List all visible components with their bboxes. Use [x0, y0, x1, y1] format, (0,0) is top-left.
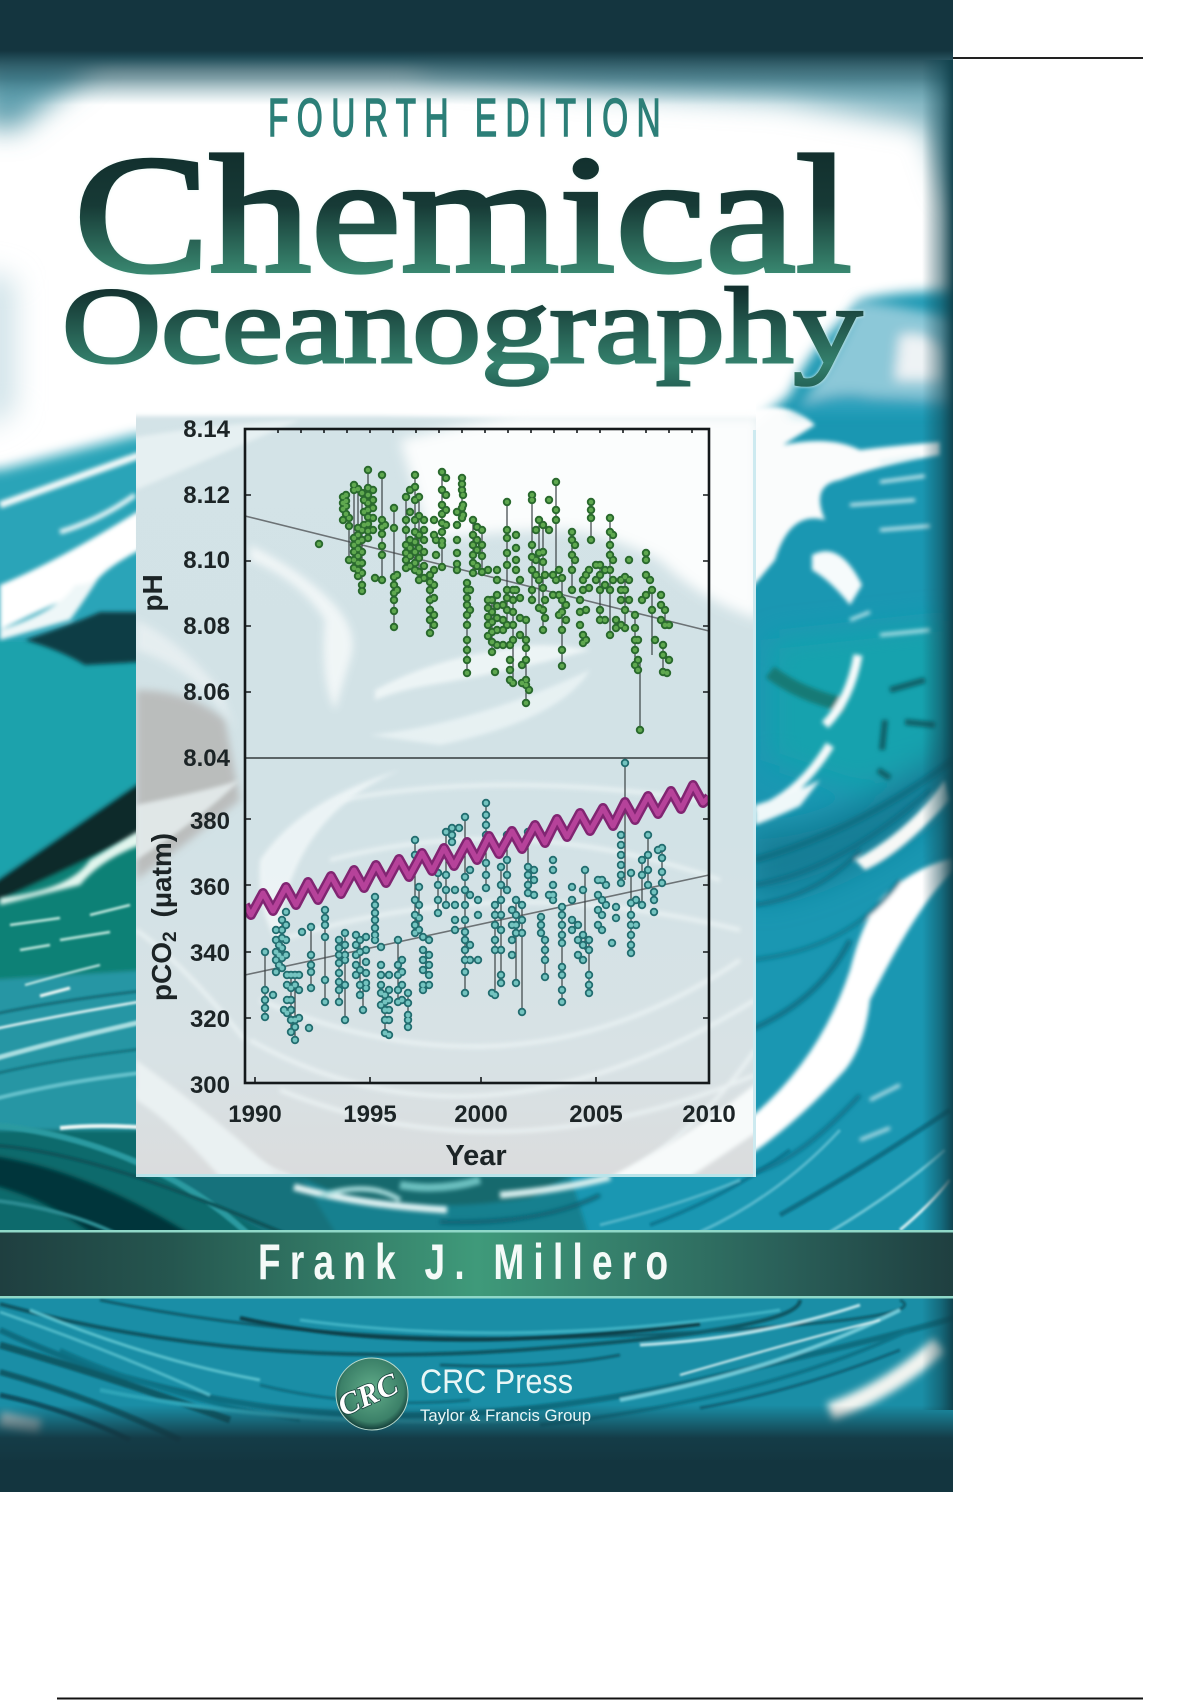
author name: Frank J. Millero	[258, 1235, 677, 1290]
pH axis labels	[183, 416, 231, 772]
bottom page rule	[57, 1698, 1143, 1700]
pH stems	[343, 470, 665, 730]
pH axis labels: 8.14	[183, 416, 231, 443]
top haze	[0, 50, 980, 430]
book cover	[0, 0, 993, 1492]
bottom fade	[0, 1406, 953, 1460]
publisher logo: CRC Press	[332, 1358, 591, 1430]
pCO2 axis labels	[190, 808, 230, 1099]
lower current	[0, 1298, 953, 1417]
right wave base tones	[756, 635, 943, 900]
logo badge: CRC	[332, 1366, 403, 1423]
top page rule	[953, 57, 1143, 59]
foam below the panel	[294, 1177, 610, 1222]
pCO2 stems	[265, 763, 662, 1040]
pCO2 axis title: (µatm)	[146, 833, 177, 917]
year axis labels: 2005	[569, 1101, 623, 1128]
left foam	[0, 455, 140, 905]
pCO2 axis labels: 380	[190, 808, 230, 835]
year axis labels: 1990	[228, 1101, 282, 1128]
pH axis labels: 8.10	[183, 547, 230, 574]
pCO2 axis labels: 360	[190, 874, 230, 901]
year axis labels: 2010	[682, 1101, 736, 1128]
author band	[0, 1230, 953, 1298]
atmospheric CO2 seasonal curve	[245, 785, 709, 915]
pH axis labels: 8.04	[183, 745, 231, 772]
year axis labels: 2000	[454, 1101, 508, 1128]
sky and foam	[0, 60, 980, 470]
pH data points	[319, 470, 669, 730]
year axis labels	[230, 1105, 735, 1122]
edition label: FOURTH EDITION	[268, 87, 669, 148]
pCO2 trend line	[245, 875, 709, 975]
pH trend line	[245, 516, 709, 631]
pH axis labels: 8.12	[183, 482, 230, 509]
top dark band	[0, 0, 953, 105]
pCO2 axis title: pCO	[146, 942, 177, 1001]
pH axis labels: 8.08	[183, 613, 230, 640]
year axis labels: 1995	[343, 1101, 397, 1128]
chart: pH and pCO2 time series	[137, 416, 736, 1172]
title: Oceanography: Oceanography	[62, 267, 862, 386]
lower left streaks	[0, 905, 290, 1236]
pH axis labels: 8.06	[183, 679, 230, 706]
publisher name: CRC Press	[420, 1363, 573, 1401]
pCO2 axis labels: 320	[190, 1006, 230, 1033]
axes frame	[245, 429, 709, 1083]
x axis title: Year	[445, 1140, 507, 1172]
right edge shading	[922, 60, 953, 1410]
ocean wave artwork	[0, 0, 993, 1492]
pCO2 data points	[265, 763, 662, 1040]
right wave foam	[750, 407, 955, 1172]
chart backdrop panel	[136, 414, 756, 1177]
pH axis title: pH	[137, 574, 168, 612]
title: Chemical: Chemical	[74, 122, 852, 308]
pCO2 axis labels: 300	[190, 1072, 230, 1099]
pCO2 axis title: 2	[160, 931, 181, 942]
pCO2 axis labels: 340	[190, 940, 230, 967]
publisher group: Taylor & Francis Group	[420, 1406, 591, 1425]
right lower strokes	[600, 1110, 950, 1232]
